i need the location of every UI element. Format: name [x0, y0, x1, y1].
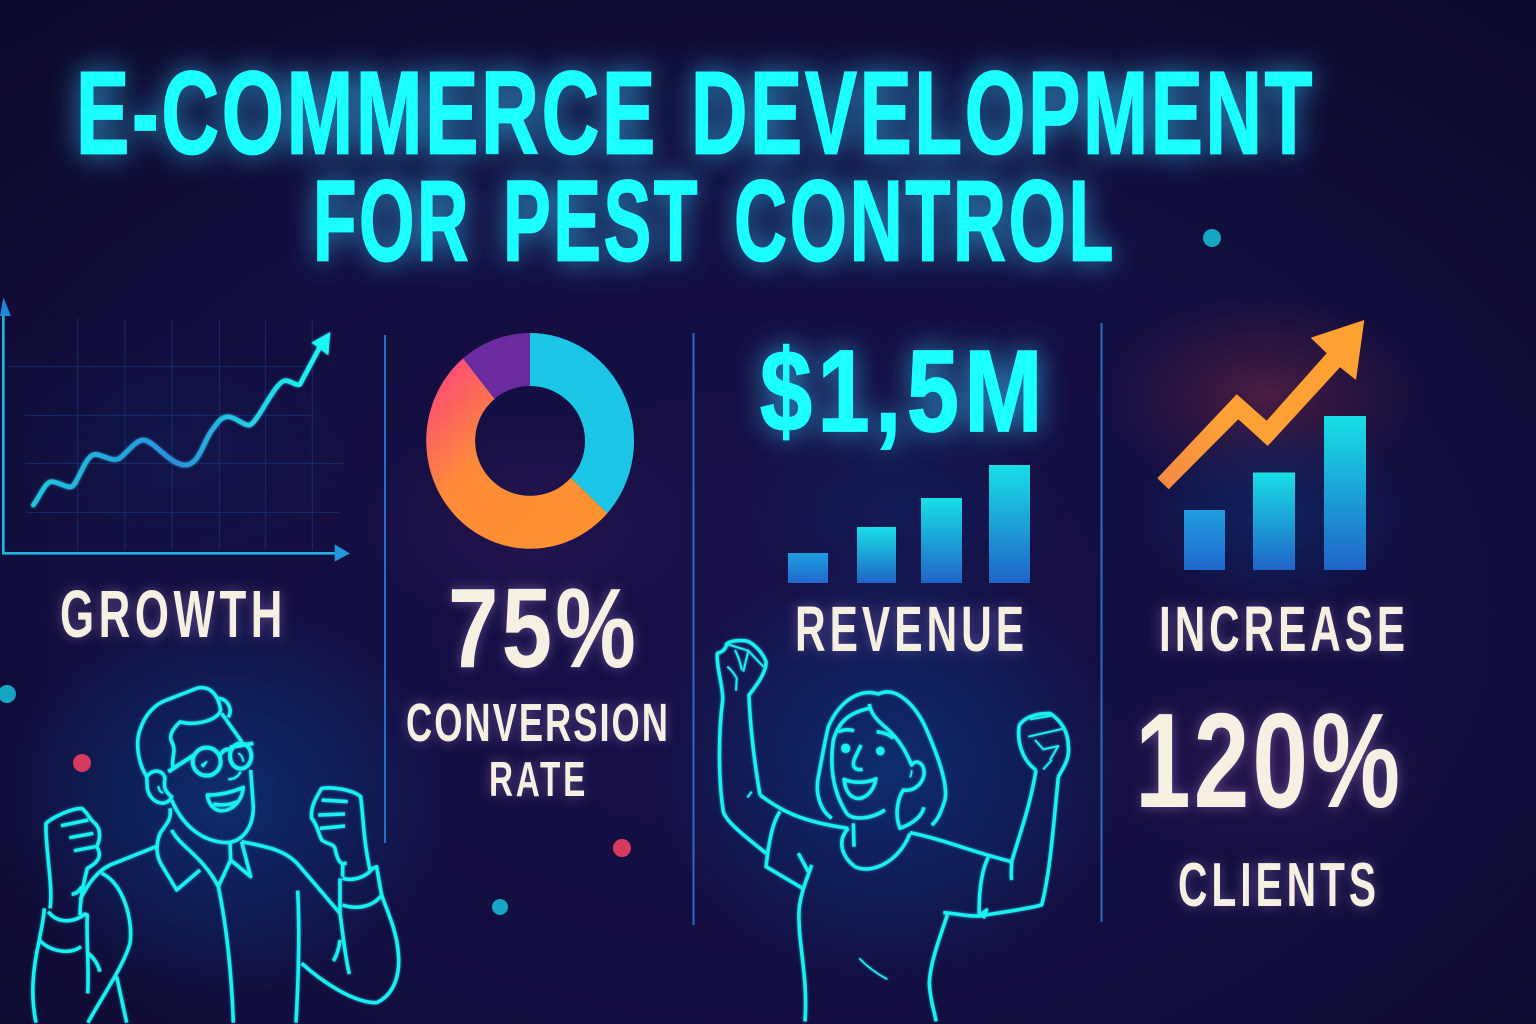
- increase arrow: [1157, 320, 1364, 489]
- man: left fist and cuff: [33, 808, 100, 1023]
- label: growth: GROWTH: [60, 577, 287, 652]
- chart grid: [8, 318, 343, 550]
- stat: 75%: 75%: [448, 565, 639, 691]
- man: head and hair: [138, 688, 253, 843]
- title: E-COMMERCE: [76, 48, 658, 180]
- chart axes: [0, 297, 350, 562]
- woman: hair: [817, 692, 946, 825]
- title: CONTROL: [734, 158, 1116, 286]
- woman: eyes: [841, 744, 885, 755]
- label: clients: CLIENTS: [1178, 851, 1380, 920]
- label: revenue: REVENUE: [795, 593, 1028, 665]
- woman: face: [832, 704, 924, 828]
- title: FOR: [313, 158, 471, 286]
- stat: 120%: 120%: [1135, 685, 1403, 836]
- background glows: [0, 290, 1450, 1000]
- woman: shirt and torso: [760, 777, 1058, 1021]
- divider 1: [384, 335, 386, 843]
- man: glasses: [168, 743, 253, 776]
- donut: cyan segment: [530, 333, 634, 513]
- revenue bar chart: [788, 465, 1030, 583]
- increase bar chart: [1184, 416, 1366, 570]
- woman: left raised arm and fist: [717, 641, 766, 853]
- label: increase: INCREASE: [1159, 593, 1409, 665]
- woman: neck and collar: [842, 823, 910, 869]
- dot: teal top right: [1203, 229, 1221, 247]
- chart trend line: [33, 332, 330, 505]
- label: conversion rate: CONVERSION: [406, 693, 670, 753]
- label: conversion rate: RATE: [489, 753, 588, 807]
- dot: red left: [73, 754, 91, 772]
- woman: right raised arm and fist: [1012, 713, 1069, 862]
- illustration: woman cheering: [717, 641, 1069, 1021]
- dot: teal center: [492, 899, 508, 915]
- donut chart: [426, 333, 634, 549]
- man: right fist and cuff: [311, 788, 382, 974]
- illustration: man cheering: [33, 688, 399, 1023]
- title: [76, 48, 1315, 286]
- title: PEST: [503, 158, 700, 286]
- donut: orange to pink segment: [426, 358, 607, 549]
- donut: purple segment: [463, 333, 530, 399]
- divider 2: [692, 333, 694, 925]
- man: mouth: [207, 787, 243, 811]
- stat: $1,5M: $1,5M: [760, 326, 1048, 456]
- panel: growth chart: [0, 297, 350, 562]
- label: conversion rate: [406, 693, 670, 807]
- divider 3: [1100, 323, 1102, 922]
- dot: red center: [613, 839, 631, 857]
- man: collar and shirt: [80, 808, 399, 1023]
- dot: teal left: [0, 685, 16, 703]
